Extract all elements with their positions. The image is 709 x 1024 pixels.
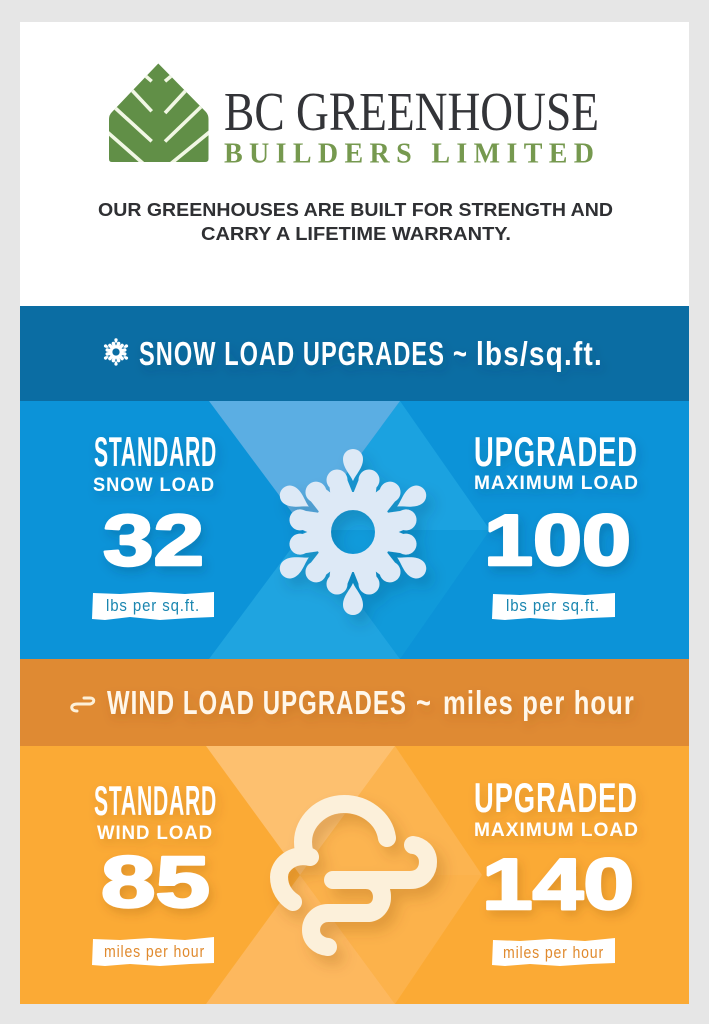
unit tag: miles per hour xyxy=(503,943,604,962)
label: maximum load: MAXIMUM LOAD xyxy=(474,472,639,494)
snow heading text: lbs/sq.ft. xyxy=(476,335,603,372)
label: maximum load: MAXIMUM LOAD xyxy=(474,819,639,841)
wind heading text: miles per hour xyxy=(443,684,635,721)
logo: BC Greenhouse Builders Limited xyxy=(105,64,599,170)
unit tag: lbs per sq.ft. xyxy=(106,596,200,615)
icon: large wind cloud xyxy=(279,804,428,947)
unit tag: miles per hour xyxy=(104,942,205,961)
logo sub-wordmark: BUILDERS LIMITED xyxy=(224,138,594,170)
tagline xyxy=(98,200,613,244)
unit tag: lbs per sq.ft. xyxy=(506,596,600,615)
label: standard: STANDARD xyxy=(94,777,217,824)
snow heading text: SNOW LOAD UPGRADES xyxy=(139,335,445,372)
upgraded wind load xyxy=(474,774,639,966)
unit tag xyxy=(92,937,214,966)
icon: green leaf house xyxy=(109,64,208,162)
panel: snow load xyxy=(20,401,689,659)
tagline: OUR GREENHOUSES ARE BUILT FOR STRENGTH AND xyxy=(98,200,613,220)
icon: large snowflake xyxy=(268,449,438,615)
unit tag xyxy=(492,938,615,966)
wind heading text: WIND LOAD UPGRADES xyxy=(107,684,407,721)
label: standard: STANDARD xyxy=(94,428,217,475)
number: 85: 85 xyxy=(101,843,210,923)
logo wordmark: BC GREENHOUSE xyxy=(224,81,599,142)
unit tag xyxy=(92,592,214,620)
snow heading text: ~ xyxy=(453,335,468,372)
number: 140: 140 xyxy=(482,845,634,925)
wind heading bar xyxy=(20,659,689,746)
wind heading text: ~ xyxy=(416,684,432,721)
white page panel xyxy=(20,22,689,306)
label: wind load: WIND LOAD xyxy=(97,822,213,844)
label: snow load: SNOW LOAD xyxy=(93,474,215,496)
number: 100: 100 xyxy=(484,501,631,581)
panel: wind load xyxy=(20,746,689,1004)
number: 32: 32 xyxy=(103,501,204,581)
standard wind load xyxy=(92,777,217,966)
snow heading bar xyxy=(20,306,689,401)
upgraded snow load xyxy=(474,428,639,620)
icon: small snowflake xyxy=(102,338,130,366)
tagline: CARRY A LIFETIME WARRANTY. xyxy=(201,224,511,244)
icon: small wind xyxy=(72,698,94,711)
standard snow load xyxy=(92,428,217,620)
unit tag xyxy=(492,593,615,620)
